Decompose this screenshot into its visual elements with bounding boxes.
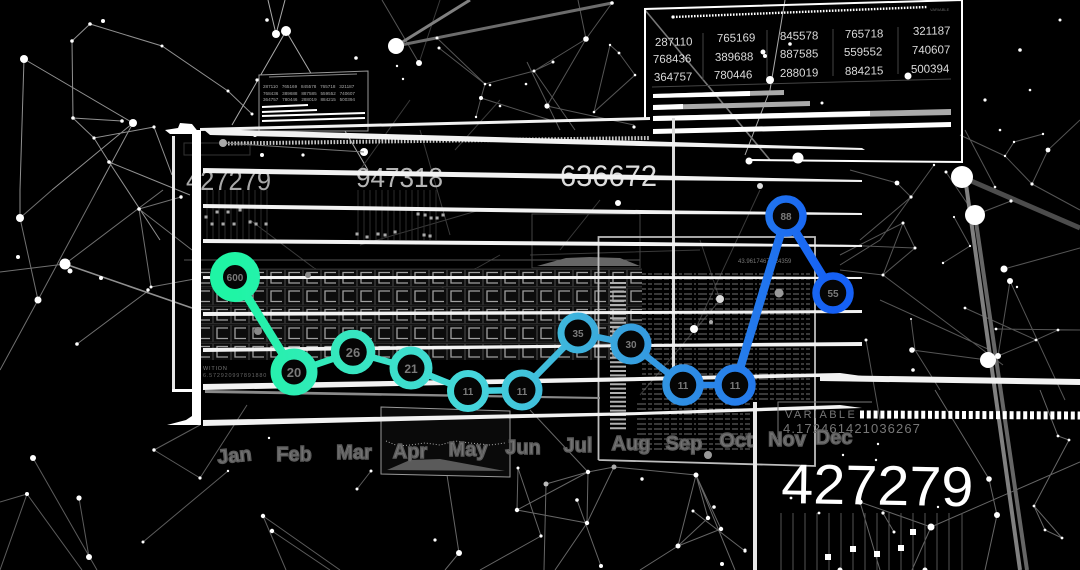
table numbers: 765169 [717, 32, 755, 45]
data point values: 35 [572, 329, 584, 340]
data point values: 600 [227, 273, 244, 284]
table numbers: 288019 [780, 67, 818, 80]
small left readout number: 6.572920997891880 [203, 373, 267, 379]
data point values: 20 [287, 365, 301, 380]
variable readout [778, 402, 921, 438]
series line [235, 216, 833, 391]
small data panel, top left: 287110 765169 845578 765718 321187 [263, 84, 355, 89]
month labels: Oct [719, 430, 753, 452]
big number 947318: 947318 [356, 162, 443, 193]
table numbers: 559552 [844, 46, 882, 59]
month labels: Mar [336, 442, 372, 464]
data point values: 26 [346, 345, 360, 360]
table numbers: 765718 [845, 28, 883, 41]
data point values: 11 [678, 381, 689, 392]
month labels: Sep [666, 433, 702, 455]
table numbers: 364757 [654, 71, 692, 84]
lower right bar graph [781, 513, 962, 570]
small left readout text: WITION [203, 366, 228, 372]
table numbers: 389688 [715, 51, 753, 64]
frame around text readout [598, 237, 815, 466]
small data panel, top left [259, 71, 368, 131]
data point values: 55 [827, 289, 839, 300]
table numbers: 321187 [913, 25, 951, 38]
small data panel, top left: 768436 389688 887585 559552 740607 [263, 91, 355, 96]
vertical axis posts [165, 118, 757, 570]
dense text readout panel [635, 272, 810, 450]
horizontal gridlines [200, 117, 1080, 426]
month labels [216, 427, 852, 469]
table numbers: 500394 [911, 63, 950, 76]
table numbers: 887585 [780, 48, 818, 61]
table numbers: 287110 [655, 36, 693, 49]
data point values: 11 [517, 387, 528, 398]
big number 427279, left: 427279 [186, 165, 271, 196]
month labels: Apr [393, 441, 427, 463]
data point values: 88 [780, 212, 792, 223]
table numbers [653, 25, 951, 84]
faint background readouts under the chart [184, 143, 640, 260]
thick series segments [235, 216, 833, 385]
line chart [216, 199, 850, 408]
small data grid [201, 268, 642, 360]
small data panel, top left: 364757 780446 288019 884215 500394 [263, 97, 355, 102]
big number 427279, lower right: 427279 [781, 452, 974, 518]
data point rings [216, 199, 850, 408]
variable readout: 4.172461421036267 [783, 421, 921, 436]
big number 636672: 636672 [560, 160, 657, 193]
table numbers: 780446 [714, 69, 752, 82]
dotted scale line, top left [228, 138, 650, 144]
month labels: Nov [768, 429, 807, 451]
variable readout: VARIABLE [785, 409, 857, 421]
overlay nodes across chart [219, 139, 784, 459]
mountain chart panel, upper middle [532, 214, 792, 268]
striped bar, lower right [860, 414, 1080, 416]
progress bars [653, 90, 951, 134]
right data panel [645, 0, 962, 162]
data point values: 30 [625, 340, 637, 351]
mountain chart panel, lower middle [381, 407, 510, 477]
right data panel: VARIABLE [930, 7, 950, 12]
data point values: 11 [730, 381, 741, 392]
month labels: Jan [216, 443, 253, 469]
mountain chart panel, upper middle: 43.9617467...24359 [738, 259, 792, 265]
month labels: Aug [612, 433, 650, 455]
link from dotted scale to node [223, 143, 364, 152]
data point values: 21 [404, 362, 418, 376]
month labels: Dec [816, 427, 852, 449]
table numbers: 768436 [653, 53, 691, 66]
month labels: May [449, 439, 488, 461]
data point values: 11 [463, 387, 474, 398]
month labels: Jun [505, 437, 541, 459]
data point values [227, 212, 839, 398]
table numbers: 740607 [912, 44, 950, 57]
table numbers: 845578 [780, 30, 818, 43]
month labels: Feb [276, 444, 312, 466]
barcode column [610, 282, 626, 430]
table numbers: 884215 [845, 65, 883, 78]
month labels: Jul [564, 435, 592, 457]
